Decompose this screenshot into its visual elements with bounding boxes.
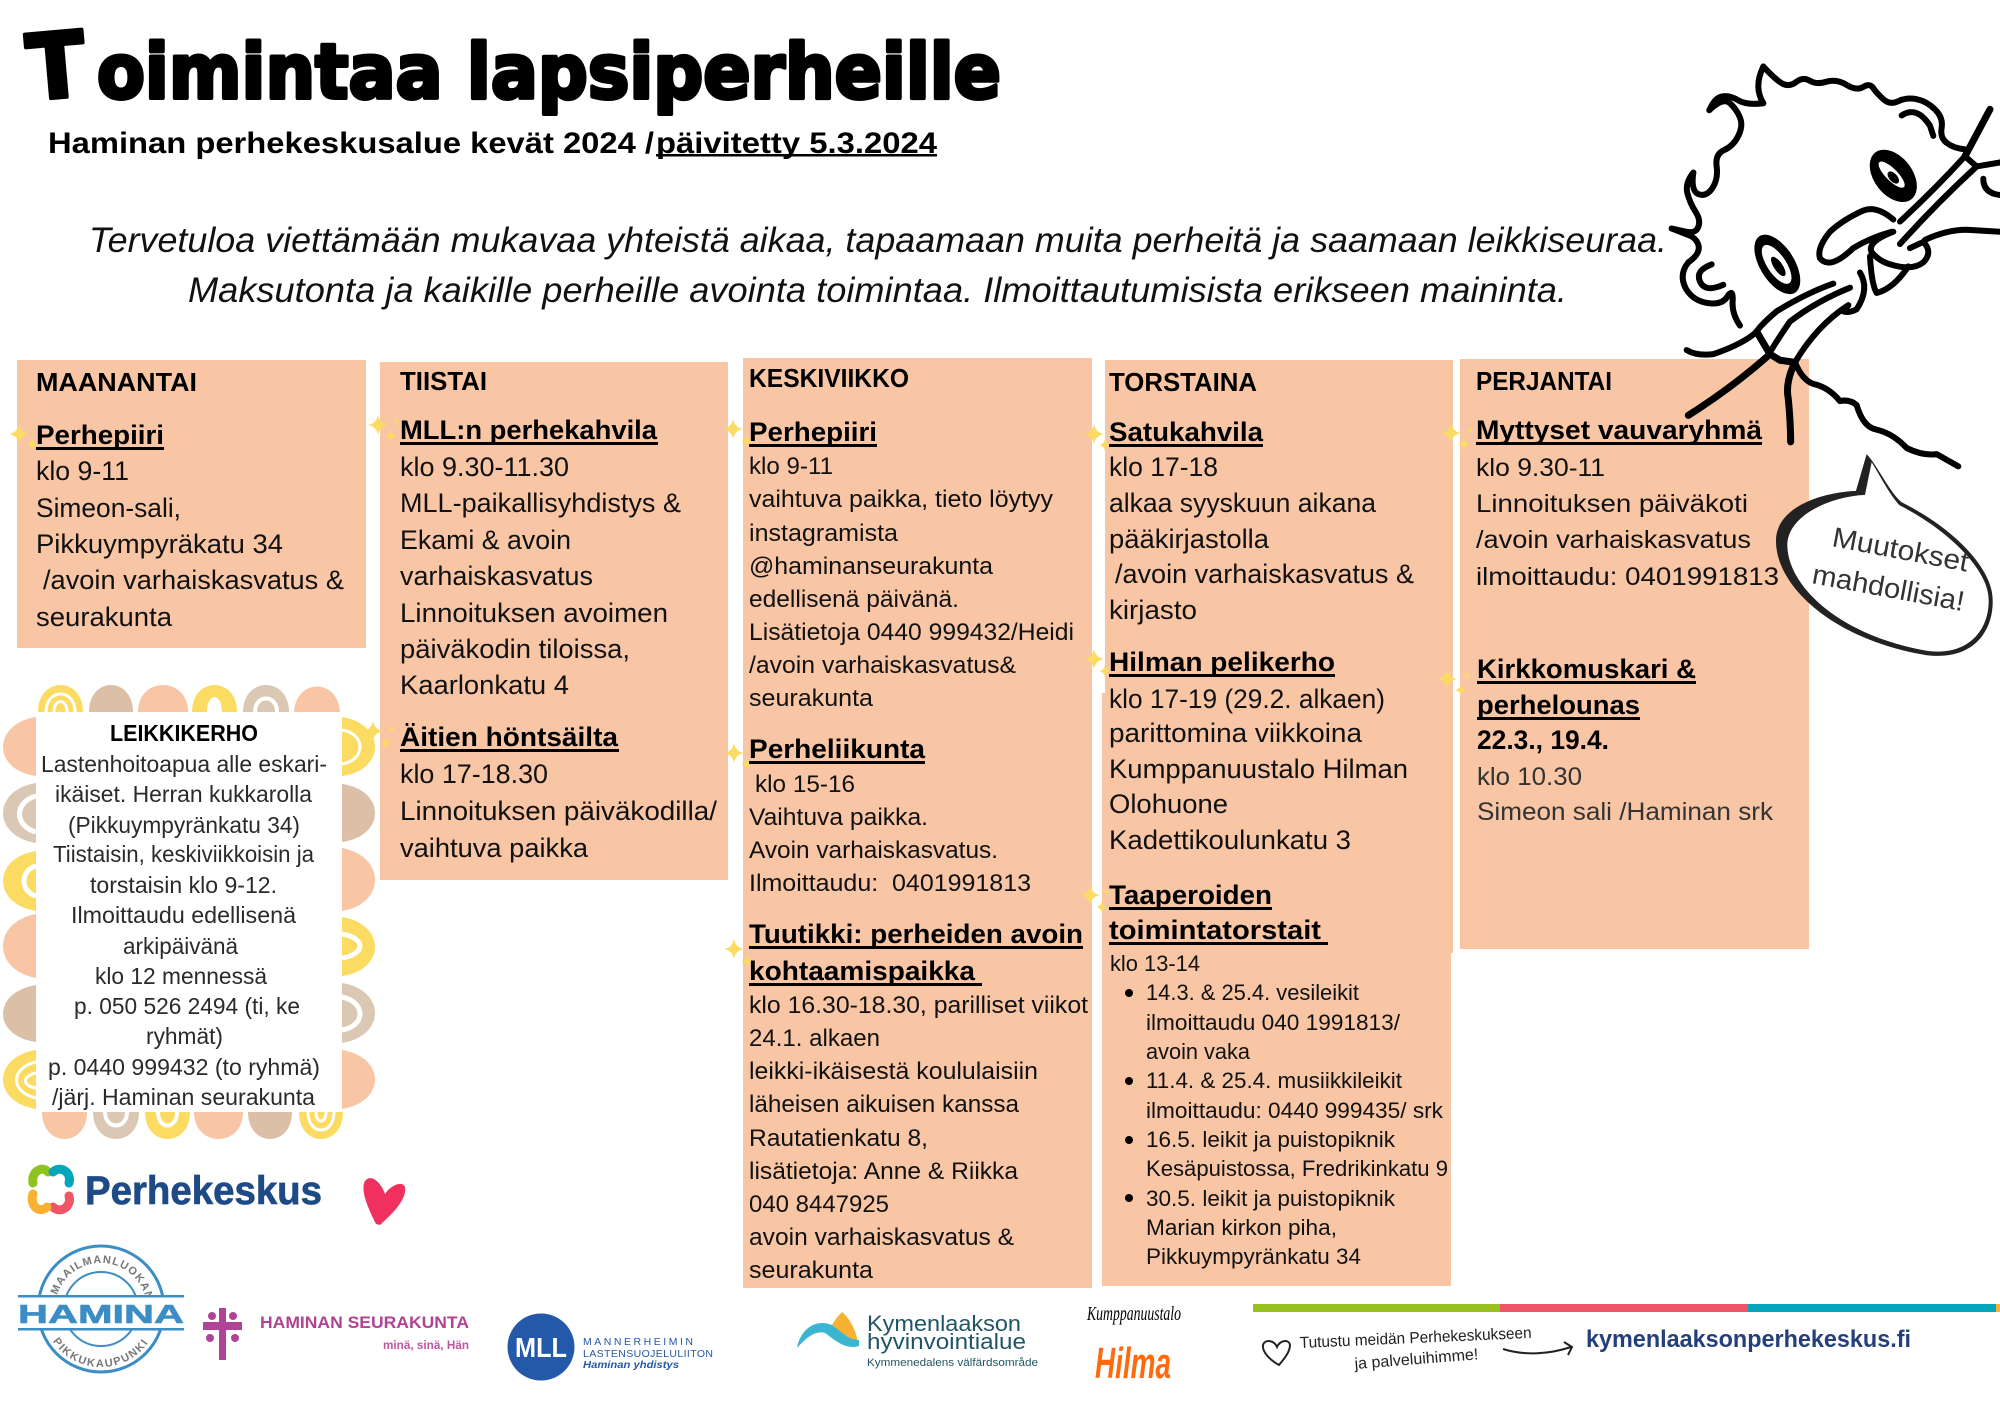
leikkikerho text: /järj. Haminan seurakunta (52, 1084, 316, 1110)
logo: Hamina: PIKKUKAUPUNKI (53, 1337, 148, 1367)
icon: sparkles (1084, 649, 1111, 677)
activity: perhepiiri: Perhepiiri (36, 420, 164, 450)
logo: Kymenlaakson hyvinvointialue (797, 1311, 1038, 1369)
intro text: Maksutonta ja kaikille perheille avointa toimintaa. Ilmoittautumisista erikseen maininta. (188, 271, 1567, 310)
activity: pelikerho: klo 17-19 (29.2. alkaen) (1109, 684, 1385, 714)
activity: höntsäilta (400, 722, 718, 863)
panel: tiistai (363, 362, 728, 880)
logo: Haminan seurakunta: minä, sinä, Hän (383, 1338, 469, 1352)
logo: Kumppanuustalo Hilma: Hilma (1095, 1339, 1171, 1388)
activity: perhepiiri: Perhepiiri (749, 417, 877, 447)
activity: taaperoiden toimintatorstait: toimintatorstait (1109, 915, 1321, 945)
icon: sparkles (9, 424, 42, 450)
activity: pelikerho: Hilman pelikerho (1109, 647, 1335, 677)
icon: left eye (1746, 225, 1809, 304)
activity: perhepiiri: /avoin varhaiskasvatus& (749, 652, 1016, 679)
colour band (1253, 1304, 2000, 1312)
activity: myttyset: /avoin varhaiskasvatus (1476, 526, 1751, 554)
panel: leikkikerho (3, 685, 375, 1139)
activity: tuutikki: 24.1. alkaen (749, 1025, 880, 1052)
activity: tuutikki: kohtaamispaikka (749, 956, 976, 986)
arrow (1503, 1342, 1572, 1355)
icon: sparkles (1441, 423, 1474, 450)
activity: taaperoiden toimintatorstait: avoin vaka (1146, 1039, 1251, 1064)
subtitle (48, 127, 937, 160)
activity: taaperoiden toimintatorstait: Pikkuympyränkatu 34 (1146, 1244, 1361, 1269)
activity: perhekahvila: MLL:n perhekahvila (400, 415, 658, 445)
logo: MLL (508, 1314, 713, 1380)
activity: perhekahvila: Linnoituksen avoimen (400, 598, 668, 628)
icon: sparkles (363, 721, 396, 749)
icon: sparkles (368, 415, 400, 442)
speech bubble (1776, 454, 1993, 656)
heading: maanantai: MAANANTAI (36, 367, 197, 397)
activity: perheliikunta: Vaihtuva paikka. (749, 804, 928, 831)
leikkikerho text: ikäiset. Herran kukkarolla (55, 781, 313, 807)
activity: taaperoiden toimintatorstait: Taaperoiden (1109, 880, 1272, 910)
logo: Hamina (18, 1244, 184, 1374)
activity: tuutikki: Tuutikki: perheiden avoin (749, 919, 1083, 949)
leikkikerho text: arkipäivänä (123, 933, 239, 959)
activity: taaperoiden toimintatorstait: ilmoittaudu: 0440 999435/ srk (1146, 1098, 1444, 1123)
website promo: Tutustu meidän Perhekeskukseen (1299, 1325, 1532, 1352)
activity: perhekahvila: MLL-paikallisyhdistys & (400, 488, 681, 518)
icon: sparkles (724, 939, 756, 967)
icon: heart outline (1263, 1341, 1290, 1365)
activity: tuutikki: läheisen aikuisen kanssa (749, 1091, 1019, 1118)
activity: satukahvila: Satukahvila (1109, 417, 1264, 447)
logo: Kymenlaakson hyvinvointialue: Kymenlaakson (867, 1311, 1021, 1336)
activity: taaperoiden toimintatorstait: klo 13-14 (1110, 951, 1200, 976)
activity: myttyset: Linnoituksen päiväkoti (1476, 490, 1748, 518)
activity: perhekahvila (400, 415, 681, 700)
heading: tiistai: TIISTAI (400, 366, 487, 396)
activity: taaperoiden toimintatorstait: 30.5. leikit ja puistopiknik (1146, 1186, 1396, 1211)
heading: torstaina: TORSTAINA (1109, 367, 1257, 397)
leikkikerho text: torstaisin klo 9-12. (90, 872, 277, 898)
intro text (89, 221, 1667, 310)
activity: pelikerho: parittomina viikkoina (1109, 718, 1362, 748)
activity: perhepiiri: instagramista (749, 520, 898, 547)
panel: torstaina (1080, 360, 1453, 1286)
icon: sparkles (1084, 424, 1111, 451)
activity: tuutikki: leikki-ikäisestä koululaisiin (749, 1058, 1038, 1085)
intro text: Tervetuloa viettämään mukavaa yhteistä aikaa, tapaamaan muita perheitä ja saamaan leikkiseuraa. (89, 221, 1667, 260)
logo: Hamina: HAMINA (18, 1299, 184, 1329)
activity: perheliikunta: klo 15-16 (755, 771, 855, 798)
leikkikerho text: LEIKKIKERHO (110, 720, 258, 746)
activity: perheliikunta: Avoin varhaiskasvatus. (749, 837, 998, 864)
activity: satukahvila: klo 17-18 (1109, 452, 1218, 482)
speech bubble: Muutokset (1830, 521, 1971, 578)
activity: perheliikunta: Perheliikunta (749, 734, 926, 764)
activity: höntsäilta: Linnoituksen päiväkodilla/ (400, 796, 718, 826)
activity: perhepiiri: Lisätietoja 0440 999432/Heidi (749, 619, 1074, 646)
activity: taaperoiden toimintatorstait: Marian kirkon piha, (1146, 1215, 1337, 1240)
activity: perhepiiri: seurakunta (749, 685, 873, 712)
activity: pelikerho (1109, 647, 1408, 855)
icon: sparkles (1437, 669, 1470, 696)
activity: höntsäilta: Äitien höntsäilta (400, 722, 619, 752)
activity: perhekahvila: Kaarlonkatu 4 (400, 670, 569, 700)
activity: perhekahvila: Ekami & avoin (400, 525, 571, 555)
activity: höntsäilta: klo 17-18.30 (400, 759, 548, 789)
logo: Haminan seurakunta (203, 1308, 469, 1360)
activity: perhekahvila: varhaiskasvatus (400, 561, 593, 591)
activity: tuutikki: lisätietoja: Anne & Riikka (749, 1158, 1018, 1185)
activity: taaperoiden toimintatorstait: 16.5. leikit ja puistopiknik (1146, 1127, 1396, 1152)
activity: kirkkomuskari: Kirkkomuskari & (1477, 654, 1696, 684)
leikkikerho text: (Pikkuympyränkatu 34) (68, 812, 300, 838)
activity: perhepiiri (36, 420, 344, 632)
activity: satukahvila: /avoin varhaiskasvatus & (1115, 559, 1414, 589)
logo: MLL: Haminan yhdistys (583, 1359, 679, 1371)
activity: perhepiiri: edellisenä päivänä. (749, 586, 959, 613)
activity: taaperoiden toimintatorstait: Kesäpuistossa, Fredrikinkatu 9 (1146, 1156, 1448, 1181)
leikkikerho text: Tiistaisin, keskiviikkoisin ja (53, 841, 315, 867)
activity: pelikerho: Kumppanuustalo Hilman (1109, 754, 1408, 784)
activity: satukahvila (1109, 417, 1414, 625)
leikkikerho text: Ilmoittaudu edellisenä (71, 902, 297, 928)
activity: perheliikunta: Ilmoittaudu: 0401991813 (749, 870, 1031, 897)
website promo: kymenlaaksonperhekeskus.fi (1586, 1326, 1911, 1353)
leikkikerho text (41, 720, 327, 1110)
leikkikerho text: Lastenhoitoapua alle eskari- (41, 751, 327, 777)
activity: perhekahvila: klo 9.30-11.30 (400, 452, 569, 482)
logo: Kumppanuustalo Hilma: Kumppanuustalo (1086, 1303, 1181, 1325)
activity: perhepiiri: /avoin varhaiskasvatus & (43, 565, 344, 595)
panel: keskiviikko (723, 358, 1092, 1288)
activity: perhepiiri: Pikkuympyräkatu 34 (36, 529, 283, 559)
leikkikerho text: p. 050 526 2494 (ti, ke (74, 993, 300, 1019)
decorative frame of rounded shapes (3, 685, 375, 1139)
illustration: child doodle (1672, 67, 2000, 466)
logo: Kumppanuustalo Hilma (1086, 1303, 1181, 1388)
icon: sparkles (723, 419, 753, 447)
logo: Hamina: MAAILMANLUOKAN (50, 1255, 152, 1295)
logo: Perhekeskus: Perhekeskus (85, 1169, 322, 1213)
leikkikerho text: p. 0440 999432 (to ryhmä) (48, 1054, 320, 1080)
website promo: ja palveluihimme! (1353, 1346, 1479, 1373)
activity: kirkkomuskari: perhelounas (1477, 690, 1640, 720)
activity: kirkkomuskari (1477, 654, 1774, 826)
activity: perhepiiri: klo 9-11 (36, 456, 129, 486)
subtitle: päivitetty 5.3.2024 (656, 127, 937, 160)
title: T (23, 12, 90, 122)
activity: perhepiiri: Simeon-sali, (36, 493, 181, 523)
activity: taaperoiden toimintatorstait: ilmoittaudu 040 1991813/ (1146, 1010, 1401, 1035)
activity: kirkkomuskari: 22.3., 19.4. (1477, 725, 1609, 755)
title: oimintaa lapsiperheille (97, 27, 1001, 116)
logo: MLL: LASTENSUOJELULIITON (583, 1348, 713, 1360)
activity: taaperoiden toimintatorstait: 11.4. & 25.4. musiikkileikit (1146, 1068, 1402, 1093)
activity: perhepiiri: klo 9-11 (749, 453, 833, 480)
activity: tuutikki: 040 8447925 (749, 1191, 889, 1218)
activity: höntsäilta: vaihtuva paikka (400, 833, 588, 863)
activity: myttyset: klo 9.30-11 (1476, 454, 1605, 482)
activity: perheliikunta (749, 734, 1031, 897)
activity: tuutikki: Rautatienkatu 8, (749, 1125, 928, 1152)
activity: perhepiiri (749, 417, 1074, 712)
activity: taaperoiden toimintatorstait: 14.3. & 25.4. vesileikit (1146, 980, 1359, 1005)
activity: tuutikki: avoin varhaiskasvatus & (749, 1224, 1014, 1251)
panel: perjantai (1437, 359, 1809, 949)
activity: satukahvila: kirjasto (1109, 595, 1197, 625)
activity: kirkkomuskari: Simeon sali /Haminan srk (1477, 798, 1774, 826)
website promo (1263, 1325, 1911, 1373)
activity: tuutikki: klo 16.30-18.30, parilliset viikot (749, 992, 1088, 1019)
speech bubble: mahdollisia! (1810, 558, 1967, 617)
activity: perhekahvila: päiväkodin tiloissa, (400, 634, 630, 664)
activity: pelikerho: Olohuone (1109, 789, 1228, 819)
logo: Haminan seurakunta: HAMINAN SEURAKUNTA (260, 1313, 469, 1332)
icon: sparkles (1080, 885, 1110, 913)
logo: MLL: MANNERHEIMIN (583, 1336, 693, 1348)
panel: maanantai (9, 360, 366, 648)
activity: tuutikki (749, 919, 1088, 1284)
logo: Kymenlaakson hyvinvointialue: Kymmenedalens välfärdsområde (867, 1357, 1038, 1369)
icon: sparkles (724, 743, 753, 770)
activity: kirkkomuskari: klo 10.30 (1477, 763, 1582, 791)
activity: pelikerho: Kadettikoulunkatu 3 (1109, 825, 1351, 855)
activity: satukahvila: alkaa syyskuun aikana (1109, 488, 1376, 518)
activity: taaperoiden toimintatorstait (1109, 880, 1448, 1269)
heading: perjantai: PERJANTAI (1476, 366, 1612, 396)
logo: MLL: MLL (515, 1332, 567, 1363)
activity: tuutikki: seurakunta (749, 1257, 873, 1284)
activity: perhepiiri: vaihtuva paikka, tieto löytyy (749, 486, 1054, 513)
leikkikerho text: ryhmät) (146, 1023, 223, 1049)
icon: right eye (1862, 139, 1925, 213)
leikkikerho text: klo 12 mennessä (95, 963, 268, 989)
subtitle: Haminan perhekeskusalue kevät 2024 / (48, 127, 655, 160)
icon: heart (363, 1178, 405, 1225)
activity: satukahvila: pääkirjastolla (1109, 524, 1269, 554)
activity: myttyset: ilmoittaudu: 0401991813 (1476, 563, 1779, 591)
activity: perhepiiri: seurakunta (36, 602, 172, 632)
activity: myttyset (1476, 415, 1779, 591)
activity: myttyset: Myttyset vauvaryhmä (1476, 415, 1763, 445)
activity: perhepiiri: @haminanseurakunta (749, 553, 993, 580)
logo: Kymenlaakson hyvinvointialue: hyvinvointialue (867, 1329, 1026, 1354)
heading: keskiviikko: KESKIVIIKKO (749, 363, 909, 393)
